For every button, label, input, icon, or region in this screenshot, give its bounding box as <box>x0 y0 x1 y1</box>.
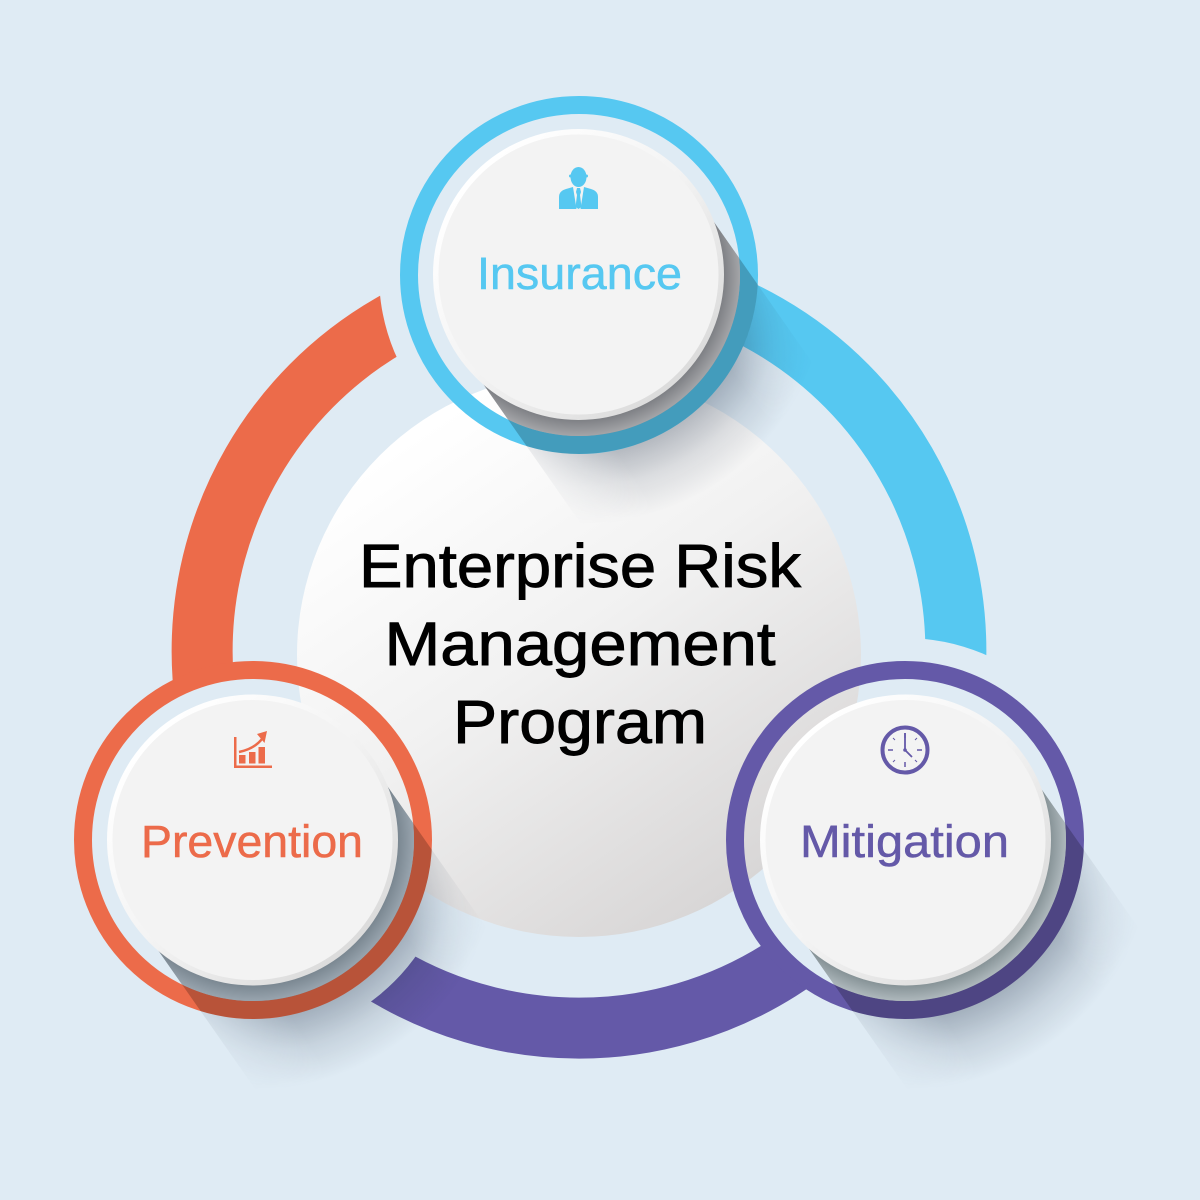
long shadow: insurance <box>527 285 786 506</box>
central hub disc <box>297 373 861 937</box>
icon: businessman <box>559 167 598 209</box>
arc: blue, insurance to mitigation <box>743 285 986 656</box>
central title: Management <box>384 610 776 678</box>
label: Insurance: Insurance <box>477 248 682 299</box>
node: Insurance <box>400 96 786 506</box>
icon: rising bar chart <box>234 731 272 768</box>
central title: Program <box>453 688 707 756</box>
disc shadow: insurance <box>484 222 758 454</box>
central title: Enterprise Risk <box>359 532 802 600</box>
node: Prevention <box>74 661 462 1072</box>
ring: prevention <box>83 670 423 1010</box>
ring: mitigation <box>735 670 1075 1010</box>
central title <box>359 532 802 756</box>
label: Prevention: Prevention <box>141 816 363 867</box>
long shadow: prevention <box>201 850 462 1072</box>
disc: insurance <box>433 129 724 420</box>
ring: insurance <box>409 105 749 445</box>
disc: prevention <box>107 694 398 986</box>
label: Mitigation: Mitigation <box>800 816 1009 867</box>
disc: mitigation <box>760 694 1051 986</box>
disc shadow: mitigation <box>809 790 1084 1019</box>
node: Mitigation <box>726 661 1114 1072</box>
disc shadow: prevention <box>158 786 432 1019</box>
arc: orange, prevention to insurance <box>172 296 397 680</box>
arc: purple, mitigation to prevention <box>371 946 806 1059</box>
icon: clock <box>882 728 928 772</box>
long shadow: mitigation <box>853 850 1114 1072</box>
